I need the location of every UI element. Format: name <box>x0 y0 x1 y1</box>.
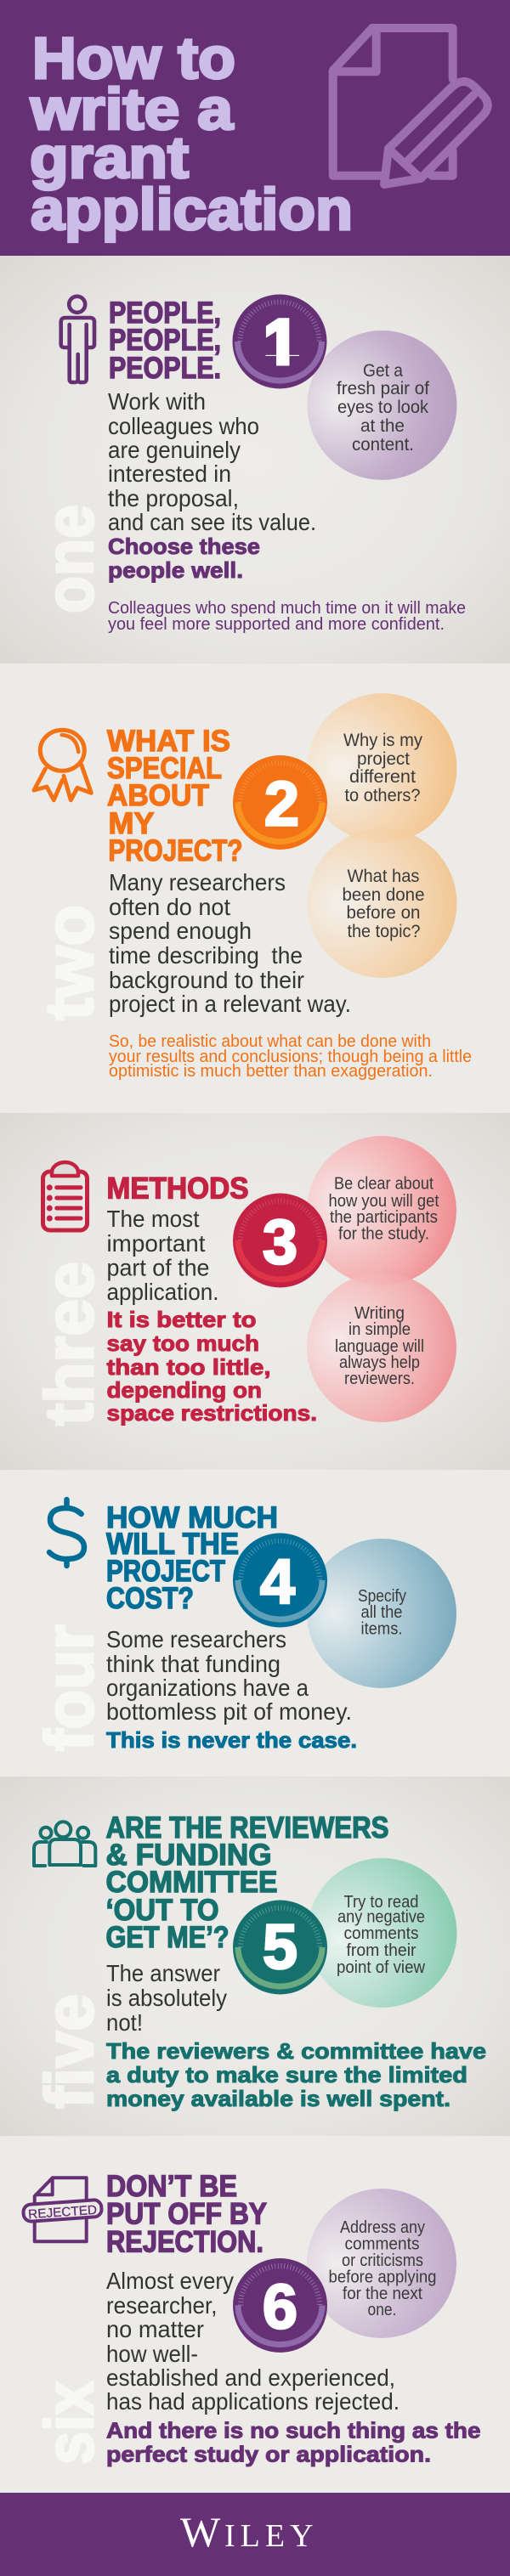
panel: step one <box>0 256 510 664</box>
heading: METHODS <box>107 1172 248 1206</box>
body text <box>106 1960 227 2036</box>
bubble: address comments: or criticisms <box>342 2251 423 2270</box>
number badge 3 <box>233 1193 327 1288</box>
bubble: what has been done: What has <box>347 867 420 886</box>
heading: & FUNDING <box>105 1839 272 1872</box>
bold statement <box>106 2418 481 2467</box>
bubble: tip one: Get a <box>363 361 403 381</box>
body text <box>106 1626 352 1725</box>
body text: not! <box>106 2009 143 2036</box>
heading: COST? <box>106 1582 194 1615</box>
bubble: what has been done: the topic? <box>347 922 420 941</box>
bubble: why different: Why is my <box>343 731 422 750</box>
note: Colleagues who spend much time on it will make <box>108 599 466 618</box>
body text: has had applications rejected. <box>106 2388 400 2415</box>
bubble: negative comments: any negative <box>337 1908 425 1927</box>
heading: PROJECT <box>106 1555 225 1588</box>
section word: one: one <box>31 505 107 613</box>
body text <box>109 869 351 1017</box>
body text: are genuinely <box>108 437 241 463</box>
note: your results and conclusions; though being a little <box>109 1048 472 1066</box>
note: So, be realistic about what can be done with <box>109 1032 431 1051</box>
heading: MY <box>109 807 155 840</box>
number badge 3: 3 <box>263 1206 298 1277</box>
body text: background to their <box>109 967 304 993</box>
body text: bottomless pit of money. <box>106 1698 352 1725</box>
logo: Wiley: W <box>180 2508 221 2556</box>
body text: often do not <box>109 894 230 920</box>
bold statement: The reviewers & committee have <box>106 2038 486 2064</box>
body text <box>108 388 316 535</box>
body text: researcher, <box>106 2292 218 2319</box>
section word: two: two <box>31 905 107 1020</box>
section word: five: five <box>31 1994 107 2109</box>
body text: interested in <box>108 460 231 487</box>
heading: REJECTION. <box>106 2226 264 2258</box>
bold statement: It is better to <box>107 1307 257 1332</box>
bold statement <box>108 534 260 583</box>
bubble: what has been done: been done <box>342 885 425 905</box>
bold statement: perfect study or application. <box>106 2442 431 2467</box>
bubble: be clear: for the study. <box>338 1225 429 1244</box>
body text: project in a relevant way. <box>109 991 351 1017</box>
bold statement: And there is no such thing as the <box>106 2418 481 2443</box>
number badge 5: 5 <box>263 1912 298 1982</box>
heading <box>107 725 243 867</box>
heading: PUT OFF BY <box>106 2197 267 2231</box>
icon: award ribbon <box>34 730 91 800</box>
icon: rejected document <box>23 2178 102 2241</box>
bubble: tip one: content. <box>352 435 414 455</box>
bubble: address comments <box>307 2189 456 2338</box>
bubble: specify items: all the <box>360 1603 403 1622</box>
bubble: specify items: Specify <box>358 1587 406 1606</box>
body text <box>107 1206 219 1305</box>
footer panel <box>0 2493 510 2576</box>
bubble: tip one: fresh pair of <box>337 379 429 398</box>
logo: Wiley: ILEY <box>224 2518 319 2554</box>
body text: organizations have a <box>106 1675 309 1701</box>
body text: colleagues who <box>108 413 259 439</box>
panel: step two <box>0 664 510 1113</box>
number badge 6 <box>233 2258 327 2353</box>
title: application <box>31 177 353 242</box>
icon: document and pencil <box>333 28 488 184</box>
body text: time describing the <box>109 942 303 969</box>
body text: Many researchers <box>109 869 286 895</box>
bubble: simple language: language will <box>335 1337 424 1356</box>
heading: PEOPLE, <box>109 297 221 330</box>
bubble: be clear <box>307 1136 456 1285</box>
body text: part of the <box>107 1254 209 1281</box>
bubble: negative comments: comments <box>343 1924 418 1943</box>
body text: think that funding <box>106 1651 280 1677</box>
note: you feel more supported and more confident. <box>108 615 445 634</box>
section word: six: six <box>31 2381 107 2465</box>
bubble: be clear: how you will get <box>328 1192 439 1211</box>
bubble: specify items <box>307 1539 456 1688</box>
body text: spend enough <box>109 918 252 944</box>
bubble: simple language: in simple <box>348 1320 411 1339</box>
body text: The answer <box>106 1960 220 1986</box>
note <box>108 599 466 634</box>
heading: ‘OUT TO <box>105 1894 219 1927</box>
bold statement: money available is well spent. <box>106 2086 450 2111</box>
heading <box>105 1811 389 1954</box>
heading: HOW MUCH <box>106 1501 278 1534</box>
note <box>109 1032 472 1081</box>
bubble: tip one: at the <box>360 416 405 436</box>
icon: group of people <box>34 1822 95 1866</box>
bubble: tip one <box>308 330 457 480</box>
bubble: what has been done <box>308 828 457 978</box>
number badge 2: 2 <box>264 768 299 839</box>
bubble: address comments: Address any <box>340 2218 425 2237</box>
heading: ABOUT <box>107 779 209 812</box>
body text: Work with <box>108 388 206 415</box>
bubble: be clear: Be clear about <box>334 1175 434 1194</box>
body text: established and experienced, <box>106 2364 395 2391</box>
bold statement: than too little, <box>107 1354 270 1380</box>
number badge 1: 1 <box>264 307 299 377</box>
section word: three: three <box>31 1262 107 1426</box>
section word: four: four <box>31 1624 107 1751</box>
logo: Wiley <box>180 2508 319 2556</box>
heading: PEOPLE. <box>109 352 221 385</box>
bubble: simple language <box>307 1273 456 1422</box>
bold statement: space restrictions. <box>107 1400 317 1426</box>
bubble: tip one: eyes to look <box>337 398 428 417</box>
bubble: why different: different <box>349 767 416 787</box>
number badge 4: 4 <box>260 1546 295 1617</box>
bubble: address comments: before applying <box>328 2268 437 2286</box>
number badge 2 <box>233 755 327 850</box>
body text <box>106 2268 400 2415</box>
panel: step three <box>0 1113 510 1470</box>
bubble: why different: project <box>357 749 410 769</box>
body text: how well- <box>106 2341 198 2367</box>
bold statement: people well. <box>108 557 243 583</box>
bold statement <box>107 1307 317 1426</box>
body text: important <box>107 1230 206 1257</box>
bold statement: a duty to make sure the limited <box>106 2062 468 2087</box>
body text: application. <box>107 1279 219 1305</box>
note: optimistic is much better than exaggeration. <box>109 1062 433 1081</box>
heading: PEOPLE, <box>109 324 221 357</box>
heading: COMMITTEE <box>105 1866 277 1899</box>
body text: Some researchers <box>106 1626 286 1652</box>
bubble: why different: to others? <box>345 786 420 805</box>
body text: no matter <box>106 2316 204 2342</box>
bubble: simple language: always help <box>339 1353 420 1372</box>
bubble: negative comments: from their <box>347 1941 416 1960</box>
bold statement: This is never the case. <box>106 1727 357 1753</box>
body text: Almost every <box>106 2268 234 2294</box>
bubble: negative comments: Try to read <box>343 1893 418 1912</box>
icon: person <box>61 297 94 382</box>
body text: and can see its value. <box>108 509 316 535</box>
icon: rejected document: REJECTED <box>28 2203 98 2222</box>
heading: GET ME’? <box>105 1921 230 1954</box>
number badge 4 <box>233 1533 327 1628</box>
number badge 1 <box>233 294 326 389</box>
bubble: specify items: items. <box>360 1619 403 1638</box>
heading <box>106 2170 267 2258</box>
bold statement: Choose these <box>108 534 260 559</box>
heading <box>106 1501 278 1615</box>
heading <box>109 297 221 385</box>
bubble: address comments: one. <box>367 2301 396 2319</box>
heading: ARE THE REVIEWERS <box>105 1811 389 1844</box>
icon: clipboard <box>42 1162 87 1230</box>
bold statement <box>106 2038 486 2111</box>
panel: step four <box>0 1470 510 1777</box>
number badge 6: 6 <box>263 2272 298 2342</box>
bubble: what has been done: before on <box>347 903 420 923</box>
heading: WILL THE <box>106 1528 239 1561</box>
bold statement: say too much <box>107 1330 259 1356</box>
bubble: be clear: the participants <box>330 1208 438 1227</box>
bubble: simple language: reviewers. <box>344 1370 415 1388</box>
panel: step six <box>0 2136 510 2493</box>
bold statement: depending on <box>107 1377 262 1403</box>
title: grant <box>30 125 189 190</box>
heading: DON’T BE <box>106 2170 237 2203</box>
bubble: negative comments: point of view <box>337 1958 426 1977</box>
bubble: why different <box>308 693 457 843</box>
body text: the proposal, <box>108 485 239 511</box>
body text: The most <box>107 1206 200 1232</box>
heading: PROJECT? <box>109 834 243 867</box>
heading: WHAT IS <box>107 725 230 758</box>
heading: SPECIAL <box>107 752 222 785</box>
body text: is absolutely <box>106 1985 227 2011</box>
header panel <box>0 0 510 256</box>
bubble: negative comments <box>308 1858 457 2008</box>
number badge 5 <box>233 1900 327 1995</box>
title <box>30 25 353 242</box>
title: write a <box>30 76 234 142</box>
panel: step five <box>0 1777 510 2136</box>
title: How to <box>32 25 235 91</box>
bubble: simple language: Writing <box>354 1304 405 1323</box>
icon: dollar sign <box>49 1500 84 1566</box>
bubble: address comments: for the next <box>343 2285 422 2303</box>
bubble: address comments: comments <box>345 2234 420 2253</box>
